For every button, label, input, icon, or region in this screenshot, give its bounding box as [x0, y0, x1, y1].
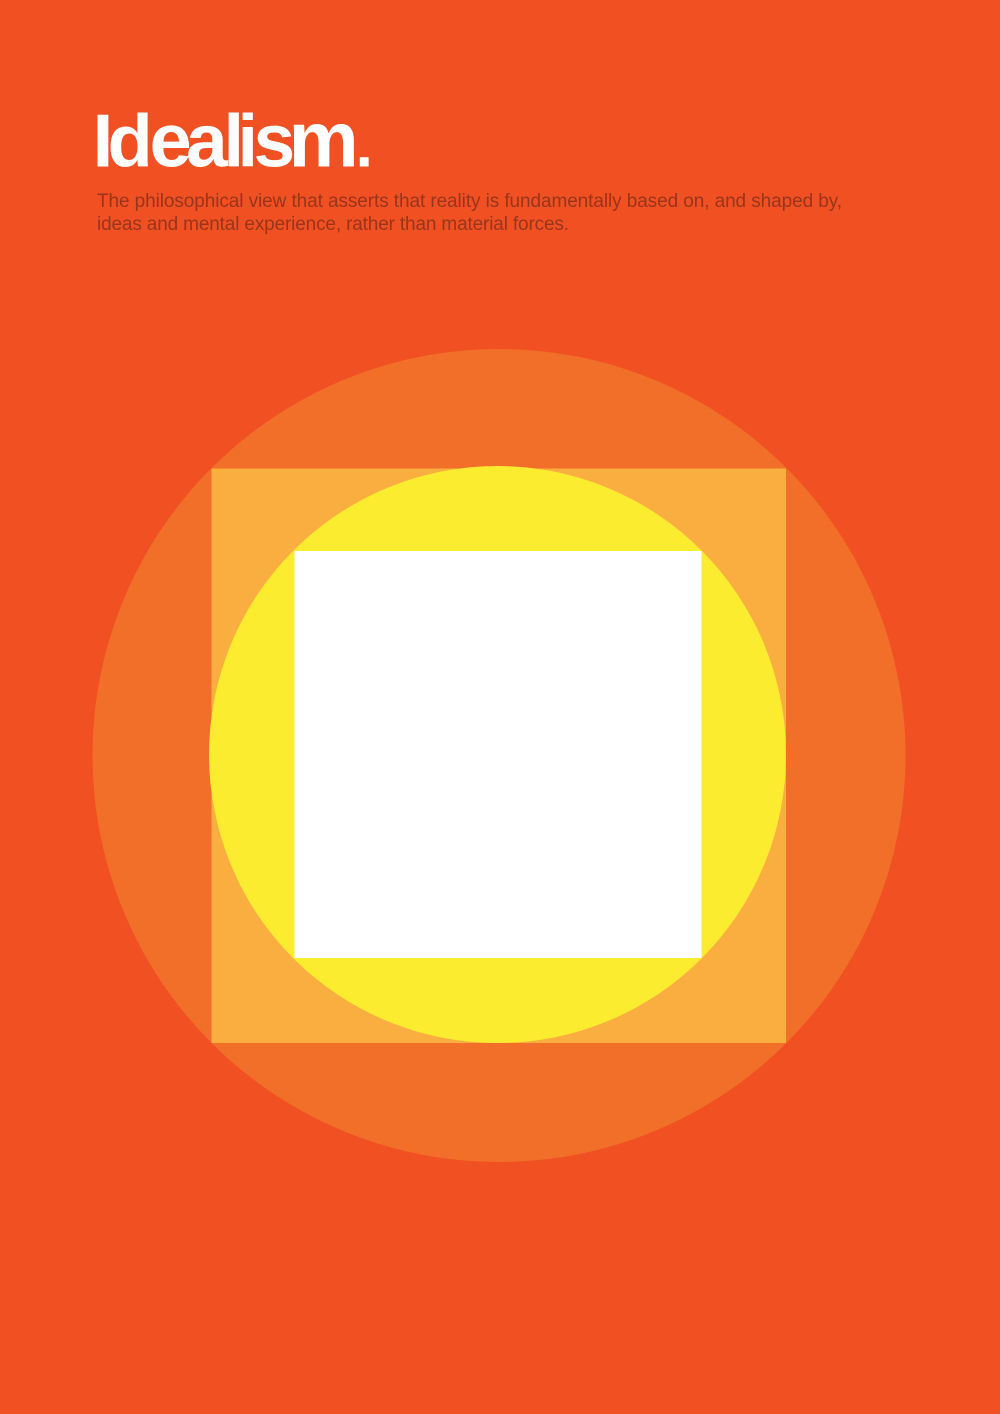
title: i: [238, 100, 258, 183]
title: s: [254, 99, 295, 183]
inner circle: [209, 466, 786, 1043]
inner white square: [294, 551, 702, 958]
title: I: [92, 99, 113, 183]
outer square: [212, 468, 786, 1043]
title: d: [108, 100, 153, 183]
title: .: [356, 112, 373, 181]
title: m: [288, 95, 359, 184]
description: The philosophical view that asserts that reality is fundamentally based on, and shaped by,: [97, 191, 842, 212]
title: e: [150, 99, 192, 184]
title: a: [186, 99, 229, 183]
diagram: nested circles and squares: [92, 349, 906, 1162]
description: ideas and mental experience, rather than material forces.: [97, 214, 569, 235]
outer circle: [92, 349, 906, 1162]
description: [97, 191, 842, 235]
title: l: [224, 100, 244, 183]
